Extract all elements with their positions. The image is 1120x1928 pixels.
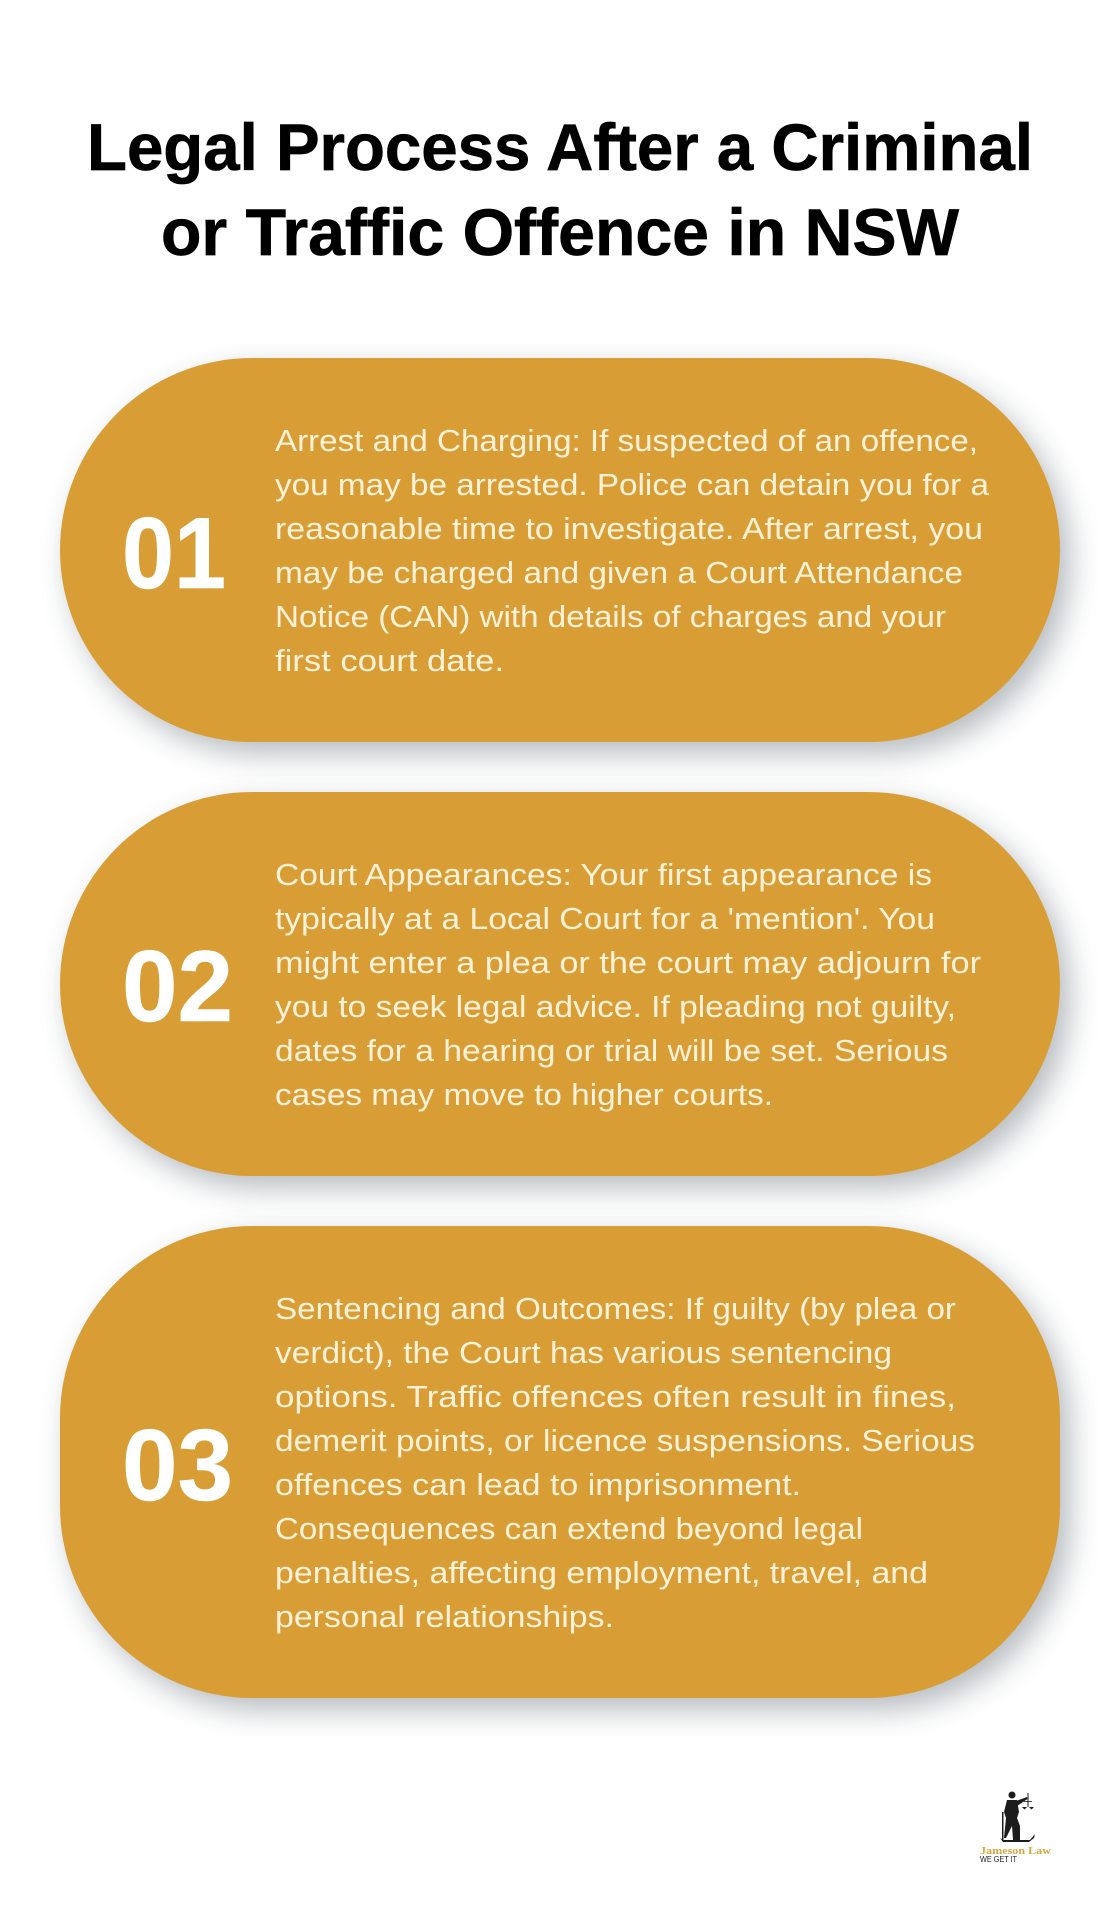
text: step 3 description bbox=[275, 1291, 975, 1634]
title bbox=[87, 110, 1033, 269]
text: step 3 description: offences can lead to imprisonment. bbox=[275, 1467, 801, 1502]
text: step 1 description: you may be arrested. Police can detain you for a bbox=[275, 467, 990, 502]
number 02: 02 bbox=[122, 931, 233, 1043]
title: or Traffic Offence in NSW bbox=[161, 195, 960, 269]
text: step 3 description: verdict), the Court has various sentencing bbox=[275, 1335, 892, 1370]
pill background 2 bbox=[60, 792, 1060, 1176]
pill background 3 bbox=[60, 1226, 1060, 1698]
panel: step 3 sentencing and outcomes bbox=[60, 1226, 1070, 1710]
text: step 3 description: demerit points, or licence suspensions. Serious bbox=[275, 1423, 975, 1458]
text: step 2 description: typically at a Local Court for a 'mention'. You bbox=[275, 901, 935, 936]
text: step 2 description: cases may move to higher courts. bbox=[275, 1077, 773, 1112]
icon: lady justice bbox=[1000, 1792, 1035, 1842]
text: step 3 description: personal relationships. bbox=[275, 1599, 614, 1634]
pill background 1 bbox=[60, 358, 1060, 742]
panel: step 1 arrest and charging bbox=[60, 358, 1070, 754]
text: step 1 description: first court date. bbox=[275, 643, 504, 678]
text: step 1 description: Arrest and Charging: If suspected of an offence, bbox=[275, 423, 978, 458]
panel: step 2 court appearances bbox=[60, 792, 1070, 1188]
title: Legal Process After a Criminal bbox=[87, 110, 1033, 184]
text: step 3 description: Consequences can extend beyond legal bbox=[275, 1511, 863, 1546]
number 03: 03 bbox=[122, 1410, 233, 1522]
text: step 1 description: may be charged and given a Court Attendance bbox=[275, 555, 963, 590]
text: step 3 description: Sentencing and Outcomes: If guilty (by plea or bbox=[275, 1291, 956, 1326]
text: step 2 description: might enter a plea or the court may adjourn for bbox=[275, 945, 981, 980]
text: step 2 description: you to seek legal advice. If pleading not guilty, bbox=[275, 989, 956, 1024]
text: step 1 description: reasonable time to investigate. After arrest, you bbox=[275, 511, 983, 546]
text: step 1 description: Notice (CAN) with details of charges and your bbox=[275, 599, 946, 634]
logo: Jameson Law bbox=[980, 1792, 1051, 1864]
text: step 3 description: options. Traffic offences often result in fines, bbox=[275, 1379, 956, 1414]
text: step 2 description bbox=[275, 857, 981, 1112]
brand name: Jameson Law bbox=[980, 1845, 1051, 1857]
text: step 2 description: dates for a hearing or trial will be set. Serious bbox=[275, 1033, 948, 1068]
text: step 1 description bbox=[275, 423, 990, 678]
text: step 2 description: Court Appearances: Your first appearance is bbox=[275, 857, 932, 892]
text: step 3 description: penalties, affecting employment, travel, and bbox=[275, 1555, 928, 1590]
tagline: WE GET IT bbox=[980, 1855, 1017, 1864]
number 01: 01 bbox=[122, 498, 226, 610]
